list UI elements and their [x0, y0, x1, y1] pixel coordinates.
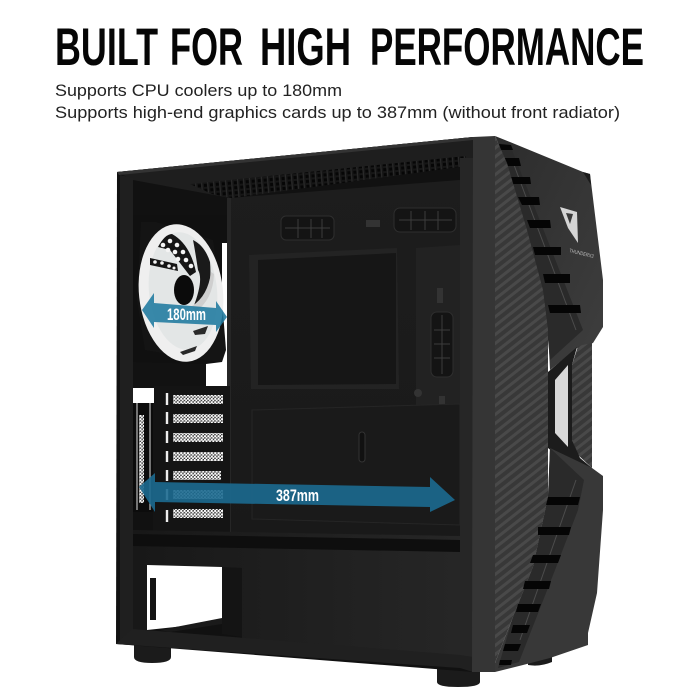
small carbon panel — [572, 343, 592, 468]
title — [55, 18, 644, 77]
PCI brackets — [166, 393, 168, 522]
top frame — [117, 137, 473, 198]
title: HIGH — [260, 18, 351, 77]
white light strip — [555, 365, 568, 447]
PSU shroud — [133, 530, 460, 656]
title: FOR — [170, 18, 243, 77]
icon: brand logo — [560, 207, 578, 243]
arrow: 180mm cooler clearance — [142, 293, 227, 332]
fan ring — [132, 220, 230, 366]
arrow: 387mm graphics card clearance — [139, 473, 455, 512]
rear vent strip — [133, 402, 153, 512]
brand wordmark: THUNDERX3 — [569, 248, 594, 260]
CPU cutout — [249, 248, 399, 389]
lower side panel — [495, 448, 603, 672]
label: 180mm: 180mm — [167, 305, 206, 324]
lower vent accent line — [520, 480, 576, 640]
panel: fan — [132, 220, 230, 366]
cable slots — [281, 208, 456, 518]
expansion slot wall — [153, 386, 230, 532]
rear wall dark block — [133, 362, 206, 388]
text block: specifications — [55, 81, 620, 122]
panel: PC case interior — [116, 137, 473, 672]
lower tray — [252, 404, 460, 525]
side carbon panel — [495, 136, 548, 663]
upper vent band — [498, 143, 583, 360]
standoff slot — [359, 432, 365, 462]
lower vent slats — [499, 497, 580, 665]
fan blade marks — [180, 326, 208, 355]
small ports — [366, 220, 445, 411]
text block: specifications: Supports high-end graphics cards up to 387mm (without front radiator) — [55, 103, 620, 122]
fan honeycomb top — [158, 234, 196, 276]
upper side panel — [495, 136, 603, 370]
right edge shade — [583, 172, 591, 185]
rear window opening — [133, 215, 227, 388]
label: 387mm: 387mm — [276, 486, 319, 505]
upper vent slats — [499, 144, 581, 313]
fan blade shading — [193, 240, 210, 309]
fan honeycomb lower — [150, 258, 178, 271]
fan blade highlight — [192, 272, 214, 312]
fan interior — [143, 229, 223, 353]
cable slot bars — [285, 211, 452, 515]
middle channel — [548, 347, 592, 468]
left pillar — [120, 175, 133, 640]
icon: case feet — [134, 640, 552, 687]
right tray pillar — [460, 158, 473, 668]
right tray section — [416, 245, 460, 407]
motherboard tray — [230, 180, 460, 536]
top mesh — [190, 156, 466, 198]
panel: front fascia — [472, 136, 603, 672]
divider pillar — [227, 198, 231, 533]
front pillar — [472, 136, 495, 672]
bottom frame — [116, 629, 473, 672]
white bracket gap — [133, 388, 154, 403]
white gap beside fan — [206, 243, 227, 388]
PSU opening — [147, 565, 222, 630]
title: BUILT — [55, 18, 158, 77]
PCI slot covers — [173, 395, 223, 518]
text block: specifications: Supports CPU coolers up to 180mm — [55, 81, 342, 100]
fan frame — [137, 222, 226, 362]
lower vent band — [498, 448, 584, 668]
case body — [116, 137, 473, 672]
upper vent accent line — [514, 165, 576, 330]
honeycomb holes — [153, 239, 193, 270]
fan hub — [174, 275, 194, 305]
